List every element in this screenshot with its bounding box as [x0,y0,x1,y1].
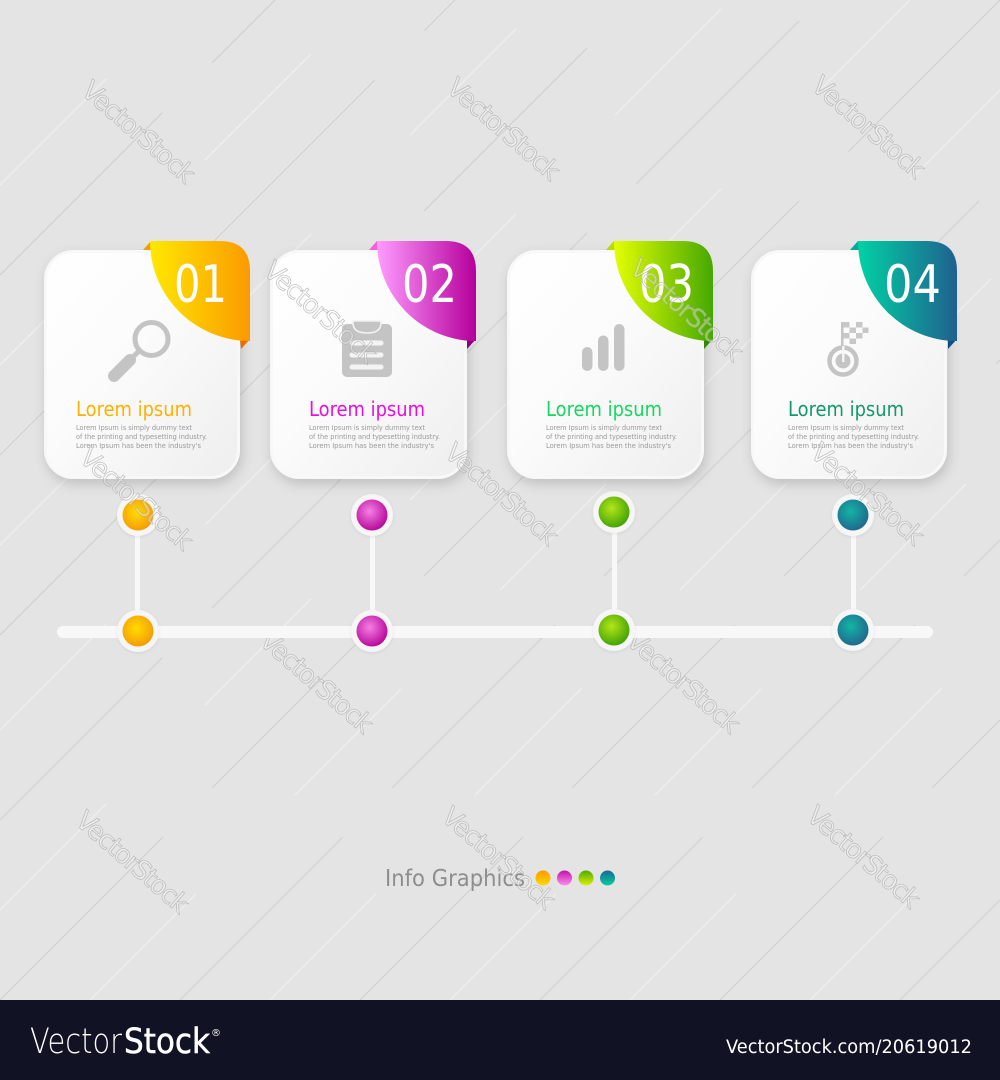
horizontal track [57,626,933,638]
watermarks behind cards: VectorStock [620,626,746,740]
brand logo: Vector [30,1022,123,1062]
number 03: 03 [639,255,694,315]
node 4 bottom [832,609,874,651]
watermarks behind cards: VectorStock [800,801,926,915]
node 4 top [832,494,874,536]
brand logo [30,1022,221,1062]
text block 04: Lorem Ipsum has been the industry's [788,441,913,450]
node 3 top [593,491,635,533]
heading 01: Lorem ipsum [76,397,192,421]
watermarks over cards: VectorStock [73,443,199,557]
text block 01 [76,423,207,450]
node 1 bottom [117,610,159,652]
text block 02: of the printing and typesetting industry. [309,432,440,441]
watermarks over cards: VectorStock [623,254,749,368]
text block 04 [788,423,919,450]
timeline [57,491,933,652]
text block 02: Lorem Ipsum is simply dummy text [309,423,425,432]
text block 04: Lorem Ipsum is simply dummy text [788,423,904,432]
node 2 bottom [351,610,393,652]
text block 01: of the printing and typesetting industry. [76,432,207,441]
icon: clipboard [342,321,392,377]
card body [752,252,946,478]
text block 04: of the printing and typesetting industry. [788,432,919,441]
number 04: 04 [884,255,941,315]
watermarks behind cards: VectorStock [805,71,931,185]
ribbon 04 [850,241,957,349]
image id: VectorStock.com/20619012 [726,1037,972,1058]
text block 03: Lorem Ipsum is simply dummy text [546,423,662,432]
watermarks behind cards: VectorStock [440,73,566,187]
text block 02 [309,423,440,450]
node 2 top [351,494,393,536]
heading 04: Lorem ipsum [788,397,904,421]
icon: bar chart [582,324,624,371]
card body [508,252,702,478]
panel: card 01 [46,241,250,478]
watermarks over cards: VectorStock [257,256,383,370]
icon: checkered flag target [830,322,868,374]
watermarks over cards: VectorStock [804,438,930,552]
card body [46,252,238,478]
text block 03 [546,423,677,450]
watermarks behind cards: VectorStock [253,626,379,740]
brand logo: ® [211,1028,221,1039]
ribbon 01 [143,241,250,349]
text block 03: Lorem Ipsum has been the industry's [546,441,671,450]
watermarks behind cards: VectorStock [69,806,195,920]
number 02: 02 [402,255,457,315]
watermarks behind cards [69,71,931,920]
text block 01: Lorem Ipsum has been the industry's [76,441,201,450]
card body [272,252,466,478]
node 3 bottom [593,609,635,651]
text block 03: of the printing and typesetting industry. [546,432,677,441]
panel: card 02 [272,241,476,478]
brand logo: Stock [124,1022,211,1062]
panel: card 03 [508,241,713,478]
panel: card 04 [752,241,957,478]
text block 01: Lorem Ipsum is simply dummy text [76,423,192,432]
watermarks over cards [73,254,930,916]
watermarks over cards: VectorStock [435,802,561,916]
text block 02: Lorem Ipsum has been the industry's [309,441,434,450]
watermarks behind cards: VectorStock [75,76,201,190]
number 01: 01 [174,255,227,315]
footer bar [0,1000,1000,1080]
footer label: Info Graphics [385,866,615,892]
ribbon 02 [369,241,476,349]
icon: magnifying glass [114,322,168,376]
watermarks over cards: VectorStock [438,438,564,552]
heading 02: Lorem ipsum [309,397,425,421]
heading 03: Lorem ipsum [546,397,662,421]
ribbon 03 [606,241,713,349]
connector stems [135,530,856,620]
footer label: Info Graphics: Info Graphics [385,866,525,892]
node 1 top [117,494,159,536]
legend dots [536,870,615,886]
